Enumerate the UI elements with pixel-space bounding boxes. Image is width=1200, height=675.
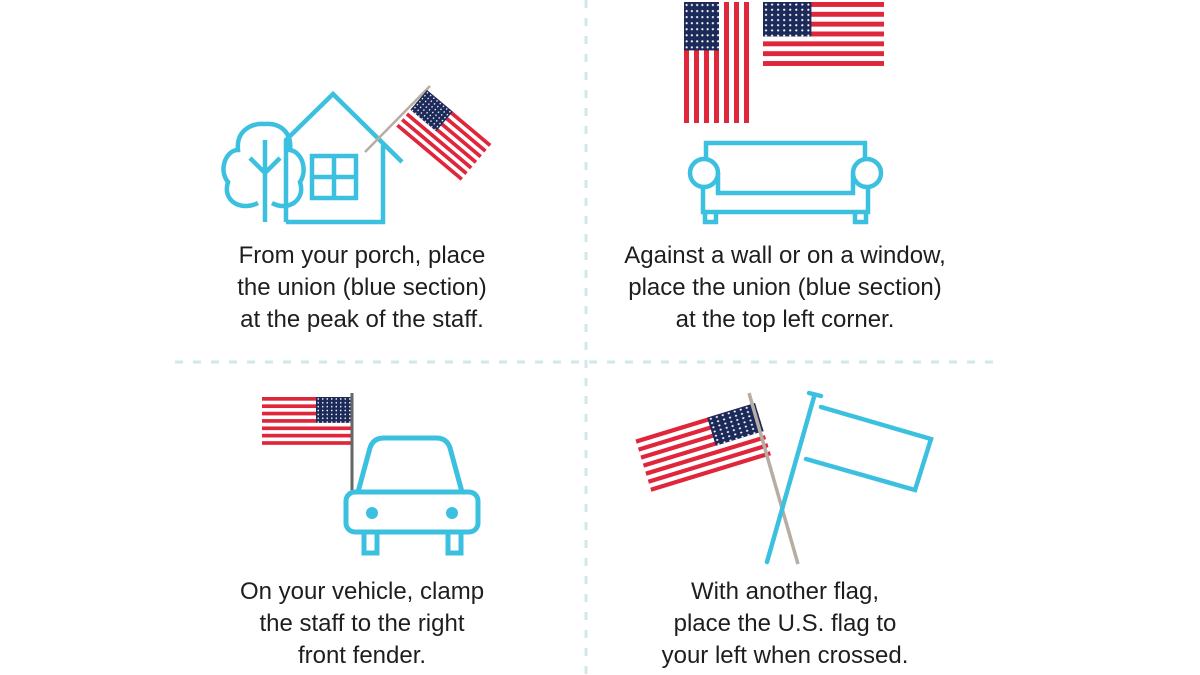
text: another flag — [662, 578, 908, 669]
text: another flag: With another flag, — [691, 578, 879, 605]
text: vehicle — [240, 578, 484, 669]
text: another flag: your left when crossed. — [662, 642, 908, 669]
text: wall — [624, 242, 946, 333]
text: porch: From your porch, place — [239, 242, 485, 269]
icon: car with flag — [262, 393, 478, 553]
text: porch: the union (blue section) — [237, 274, 487, 301]
text: vehicle: front fender. — [298, 642, 426, 669]
icon: crossed flags — [635, 393, 931, 564]
text: another flag: place the U.S. flag to — [674, 610, 896, 637]
text: vehicle: the staff to the right — [259, 610, 465, 637]
icon: house with tree and flag — [223, 86, 491, 222]
text: wall: place the union (blue section) — [628, 274, 942, 301]
text: porch: at the peak of the staff. — [240, 306, 484, 333]
text: wall: Against a wall or on a window, — [624, 242, 946, 269]
text: porch — [237, 242, 487, 333]
text: vehicle: On your vehicle, clamp — [240, 578, 484, 605]
icon: flags on wall and sofa — [684, 2, 884, 222]
text: wall: at the top left corner. — [676, 306, 894, 333]
